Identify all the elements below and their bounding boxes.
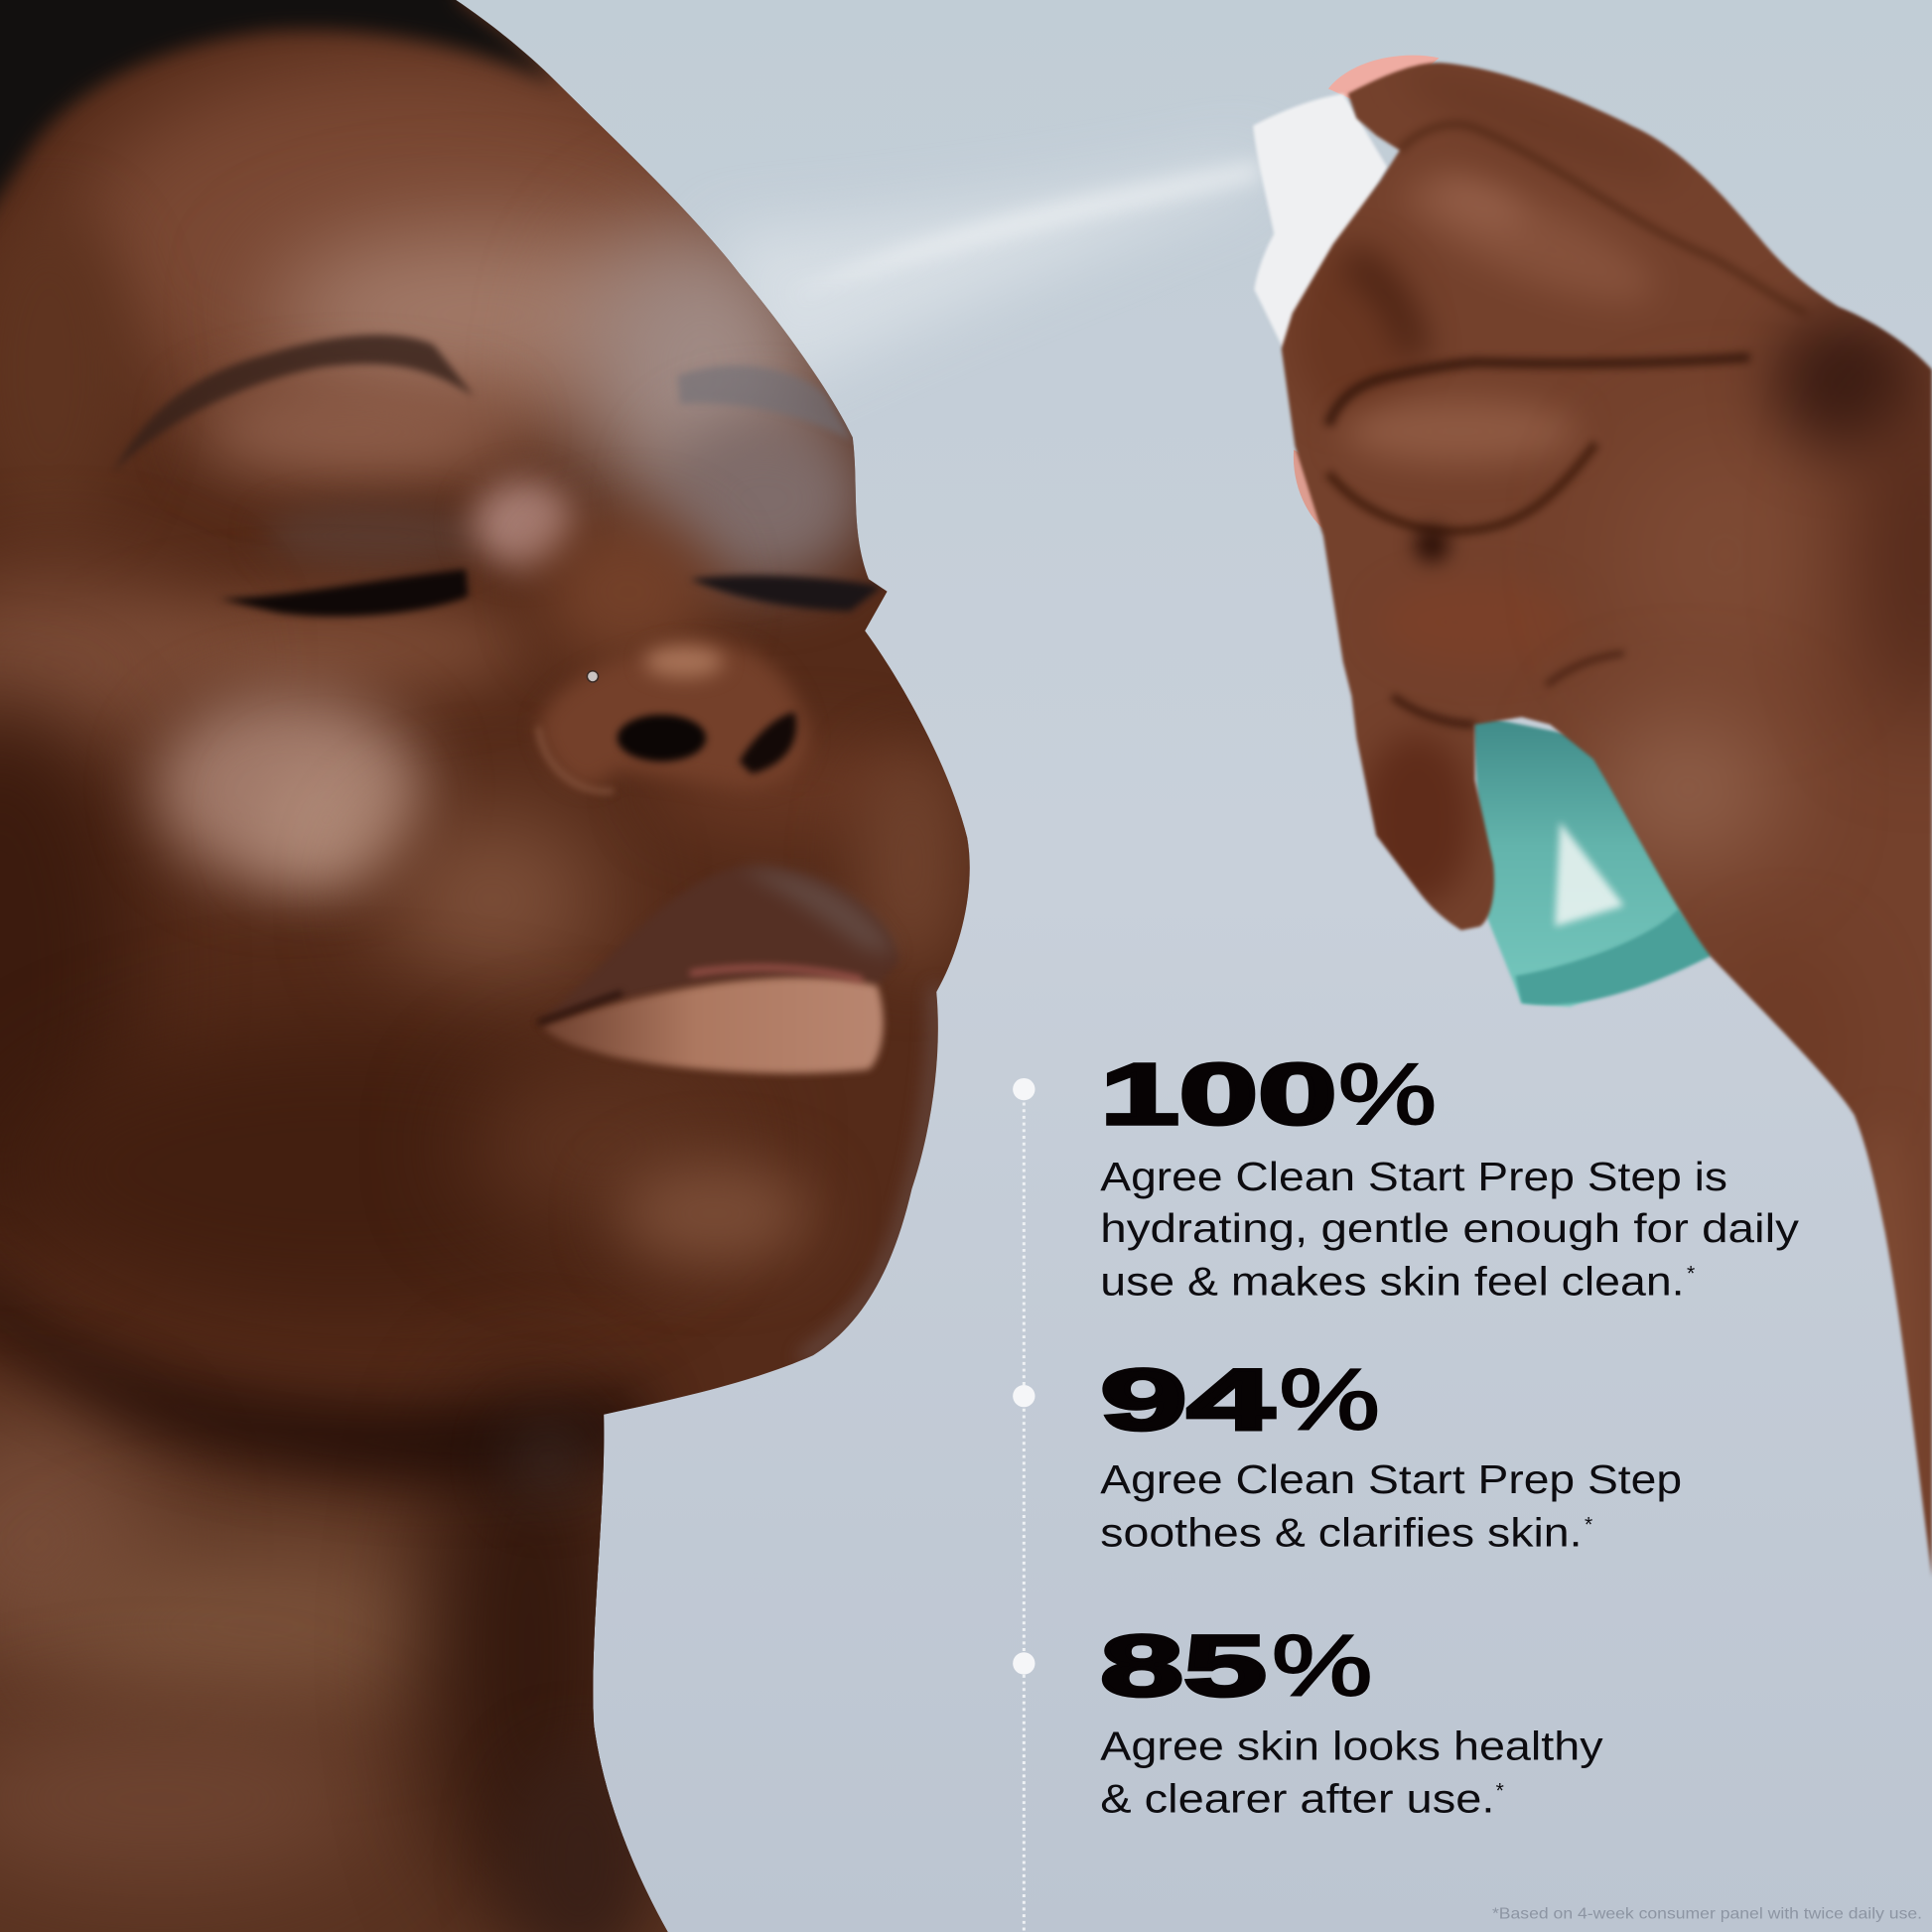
bottle shoulders bbox=[1430, 324, 1534, 561]
bottle teal body bbox=[1472, 715, 1716, 1007]
stat: 100% bbox=[1100, 1046, 1800, 1304]
stat: 85% bbox=[1100, 1618, 1603, 1822]
stat: 85%: & clearer after use. bbox=[1100, 1776, 1494, 1822]
stat: 85%: % bbox=[1272, 1618, 1373, 1715]
stat: 85%: Agree skin looks healthy bbox=[1100, 1723, 1603, 1768]
stat: 94%: Agree Clean Start Prep Step bbox=[1100, 1456, 1682, 1502]
pump cap white bbox=[1253, 93, 1387, 347]
eyebrow left bbox=[113, 335, 475, 472]
hand bbox=[1279, 60, 1932, 1576]
stat: 94%: % bbox=[1279, 1352, 1380, 1449]
spray mist beam bbox=[715, 155, 1259, 394]
stat: 100%: % bbox=[1338, 1046, 1437, 1143]
stat: 100%: hydrating, gentle enough for daily bbox=[1100, 1205, 1800, 1251]
eyebrow right bbox=[678, 365, 853, 441]
stat timeline dotted line bbox=[1013, 1078, 1035, 1932]
stat: 94% bbox=[1100, 1352, 1682, 1556]
neck shading bbox=[593, 1465, 668, 1932]
bottle highlight bbox=[1555, 822, 1624, 926]
stat: 94%: soothes & clarifies skin. bbox=[1100, 1510, 1583, 1556]
nail top bbox=[1328, 56, 1440, 101]
stat: 94%: * bbox=[1585, 1514, 1592, 1537]
bottle base bbox=[1516, 909, 1713, 1005]
nail lower bbox=[1294, 450, 1324, 530]
nose bbox=[538, 641, 808, 791]
lips bbox=[536, 866, 899, 1073]
stat: 100%: 100 bbox=[1100, 1046, 1337, 1143]
footnote: *Based on 4-week consumer panel with twice daily use. bbox=[1492, 1905, 1922, 1922]
eye left closed bbox=[219, 569, 469, 617]
stat: 85%: * bbox=[1496, 1780, 1504, 1803]
stat: 85%: 85 bbox=[1100, 1618, 1267, 1715]
photo: woman's face and neck in profile bbox=[0, 0, 986, 1932]
photo: spray bottle and hand bbox=[1232, 37, 1932, 1639]
stat: 100%: Agree Clean Start Prep Step is bbox=[1100, 1154, 1727, 1199]
hair bbox=[0, 0, 556, 215]
skin shading bbox=[0, 50, 967, 1932]
stat: 100%: * bbox=[1687, 1262, 1695, 1285]
stat: 94%: 94 bbox=[1100, 1352, 1274, 1449]
stat: 100%: use & makes skin feel clean. bbox=[1100, 1258, 1685, 1304]
finger creases bbox=[1400, 124, 1806, 313]
eye right closed bbox=[690, 576, 883, 612]
